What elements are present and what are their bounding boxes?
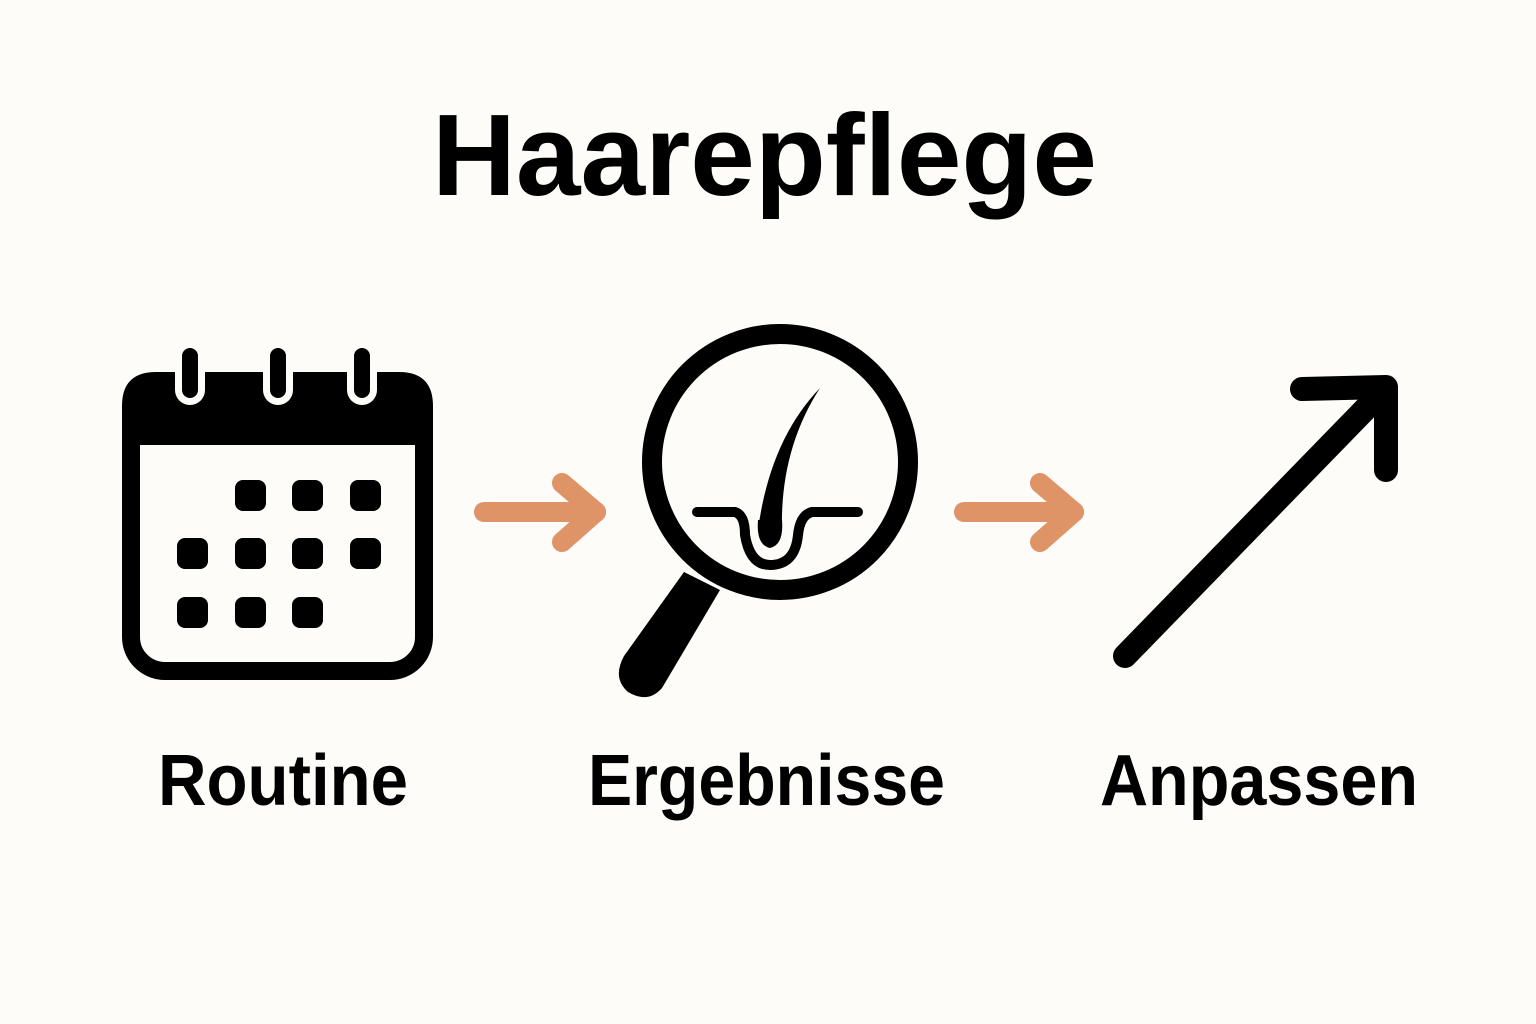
icon: calendar [122, 356, 433, 671]
arrow: results to adjust [964, 483, 1074, 542]
icon: magnifier with hair follicle [619, 334, 908, 697]
label: Anpassen: Anpassen [1100, 741, 1418, 821]
arrow: routine to results [484, 483, 596, 542]
label: Ergebnisse: Ergebnisse [588, 741, 945, 821]
title: Haarepflege [432, 90, 1097, 220]
label: Routine: Routine [158, 741, 408, 821]
icon: rising arrow [1125, 387, 1386, 656]
